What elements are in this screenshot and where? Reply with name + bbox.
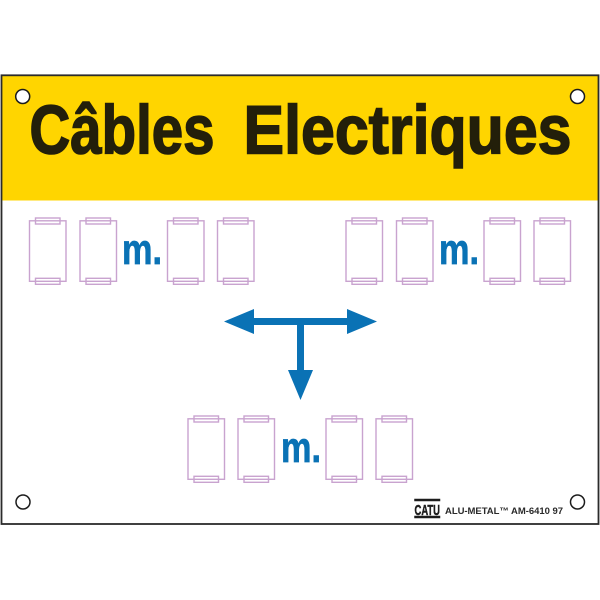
title [30,92,572,168]
CATU logo [414,499,440,519]
product reference: ALU-METAL™ AM-6410 97 [445,506,563,517]
left length field: m. [122,226,162,274]
mounting holes [16,90,584,509]
left length field [30,218,254,284]
right length field: m. [439,226,479,274]
right length field [346,218,570,284]
CATU logo: CATU [414,502,440,519]
sign border [2,75,598,524]
bottom length field [188,416,412,482]
header band [2,76,598,200]
title: Câbles [30,92,214,168]
bottom length field: m. [281,424,321,472]
T-shaped arrow [224,309,377,400]
